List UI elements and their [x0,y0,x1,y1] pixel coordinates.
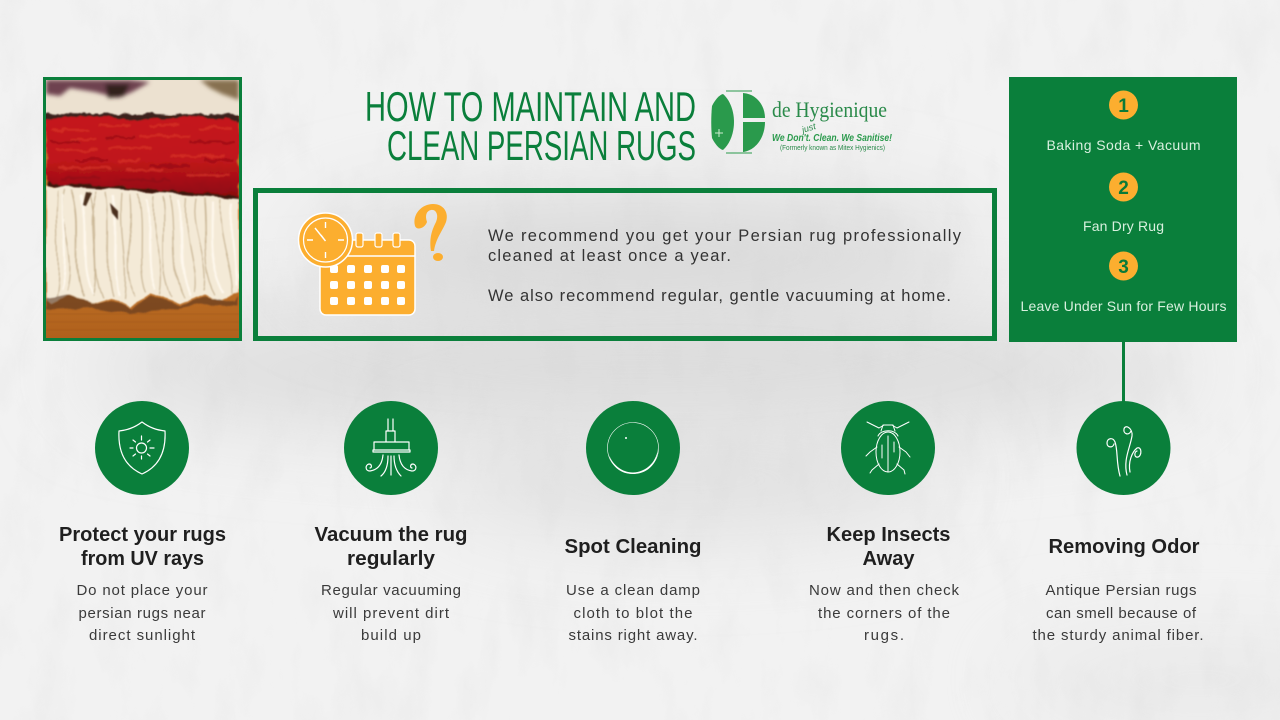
tip: vacuum: build up [361,627,421,644]
tip: spot cleaning: stains right away. [568,627,698,644]
tip: insects: Keep Insects [826,523,950,546]
logo wordmark: (Formerly known as Mitex Hygienics) [780,145,885,152]
tip: vacuum: Regular vacuuming [321,582,461,599]
tip: spot cleaning: Use a clean damp [566,582,700,599]
tip: insects: Away [862,547,915,570]
logo wordmark: just [800,121,817,135]
step 2 [1083,172,1164,234]
step 1: Baking Soda + Vacuum [1046,137,1200,153]
tip: vacuum [314,401,468,644]
tip: odor: Antique Persian rugs [1046,582,1196,599]
tip: spot cleaning: Spot Cleaning [564,535,702,558]
step 1: 1 [1118,96,1129,117]
tip: protect from UV: Protect your rugs [59,523,226,546]
recommendation text: We also recommend regular, gentle vacuuming at home. [488,287,951,305]
tip: protect from UV: Do not place your [76,582,208,599]
logo wordmark: We Don't. Clean. We Sanitise! [772,133,893,144]
tip: vacuum: regularly [347,547,436,570]
tip: odor: the sturdy animal fiber. [1032,627,1204,644]
tip: vacuum: Vacuum the rug [314,523,468,546]
tip: insects: rugs. [864,627,904,644]
icon: vacuum head [344,401,438,495]
photo: persian rug fringe [44,78,240,340]
tip: insects: the corners of the [818,605,950,622]
tip: odor: Removing Odor [1048,535,1200,558]
panel: recommendation [256,190,994,338]
tip: spot cleaning [564,401,702,644]
step 3 [1020,252,1226,314]
logo wordmark [772,97,893,152]
icon: beetle [841,401,935,495]
logo: de Hygienique [711,91,893,153]
tip: protect from UV: from UV rays [81,547,204,570]
recommendation text: cleaned at least once a year. [488,247,731,265]
recommendation text: We recommend you get your Persian rug professionally [488,227,962,245]
title: HOW TO MAINTAIN AND [365,83,696,130]
tip: spot cleaning: cloth to blot the [574,605,692,622]
panel: cleaning steps [1009,77,1237,404]
recommendation text [488,227,962,305]
icon: odor wisps [1076,401,1170,495]
title [365,83,696,169]
tip: insects: Now and then check [809,582,960,599]
connector line [1122,342,1125,404]
tip: vacuum: will prevent dirt [332,605,450,622]
step 1 [1046,90,1200,153]
tip: protect from UV [59,401,226,644]
icon: water spot [586,401,680,495]
tip: protect from UV: direct sunlight [89,627,196,644]
step 2: 2 [1118,178,1129,199]
tip: odor [1032,401,1204,644]
icon: calendar with clock and question mark [298,204,447,315]
logo wordmark: de Hygienique [772,97,887,122]
step 3: Leave Under Sun for Few Hours [1020,298,1226,314]
tip: protect from UV: persian rugs near [78,605,206,622]
step 2: Fan Dry Rug [1083,218,1164,234]
tip: insects [809,401,960,644]
step 3: 3 [1118,257,1129,278]
title: CLEAN PERSIAN RUGS [387,122,696,169]
tip: odor: can smell because of [1046,605,1197,622]
icon: shield with sun [95,401,189,495]
logo emblem [711,91,765,153]
